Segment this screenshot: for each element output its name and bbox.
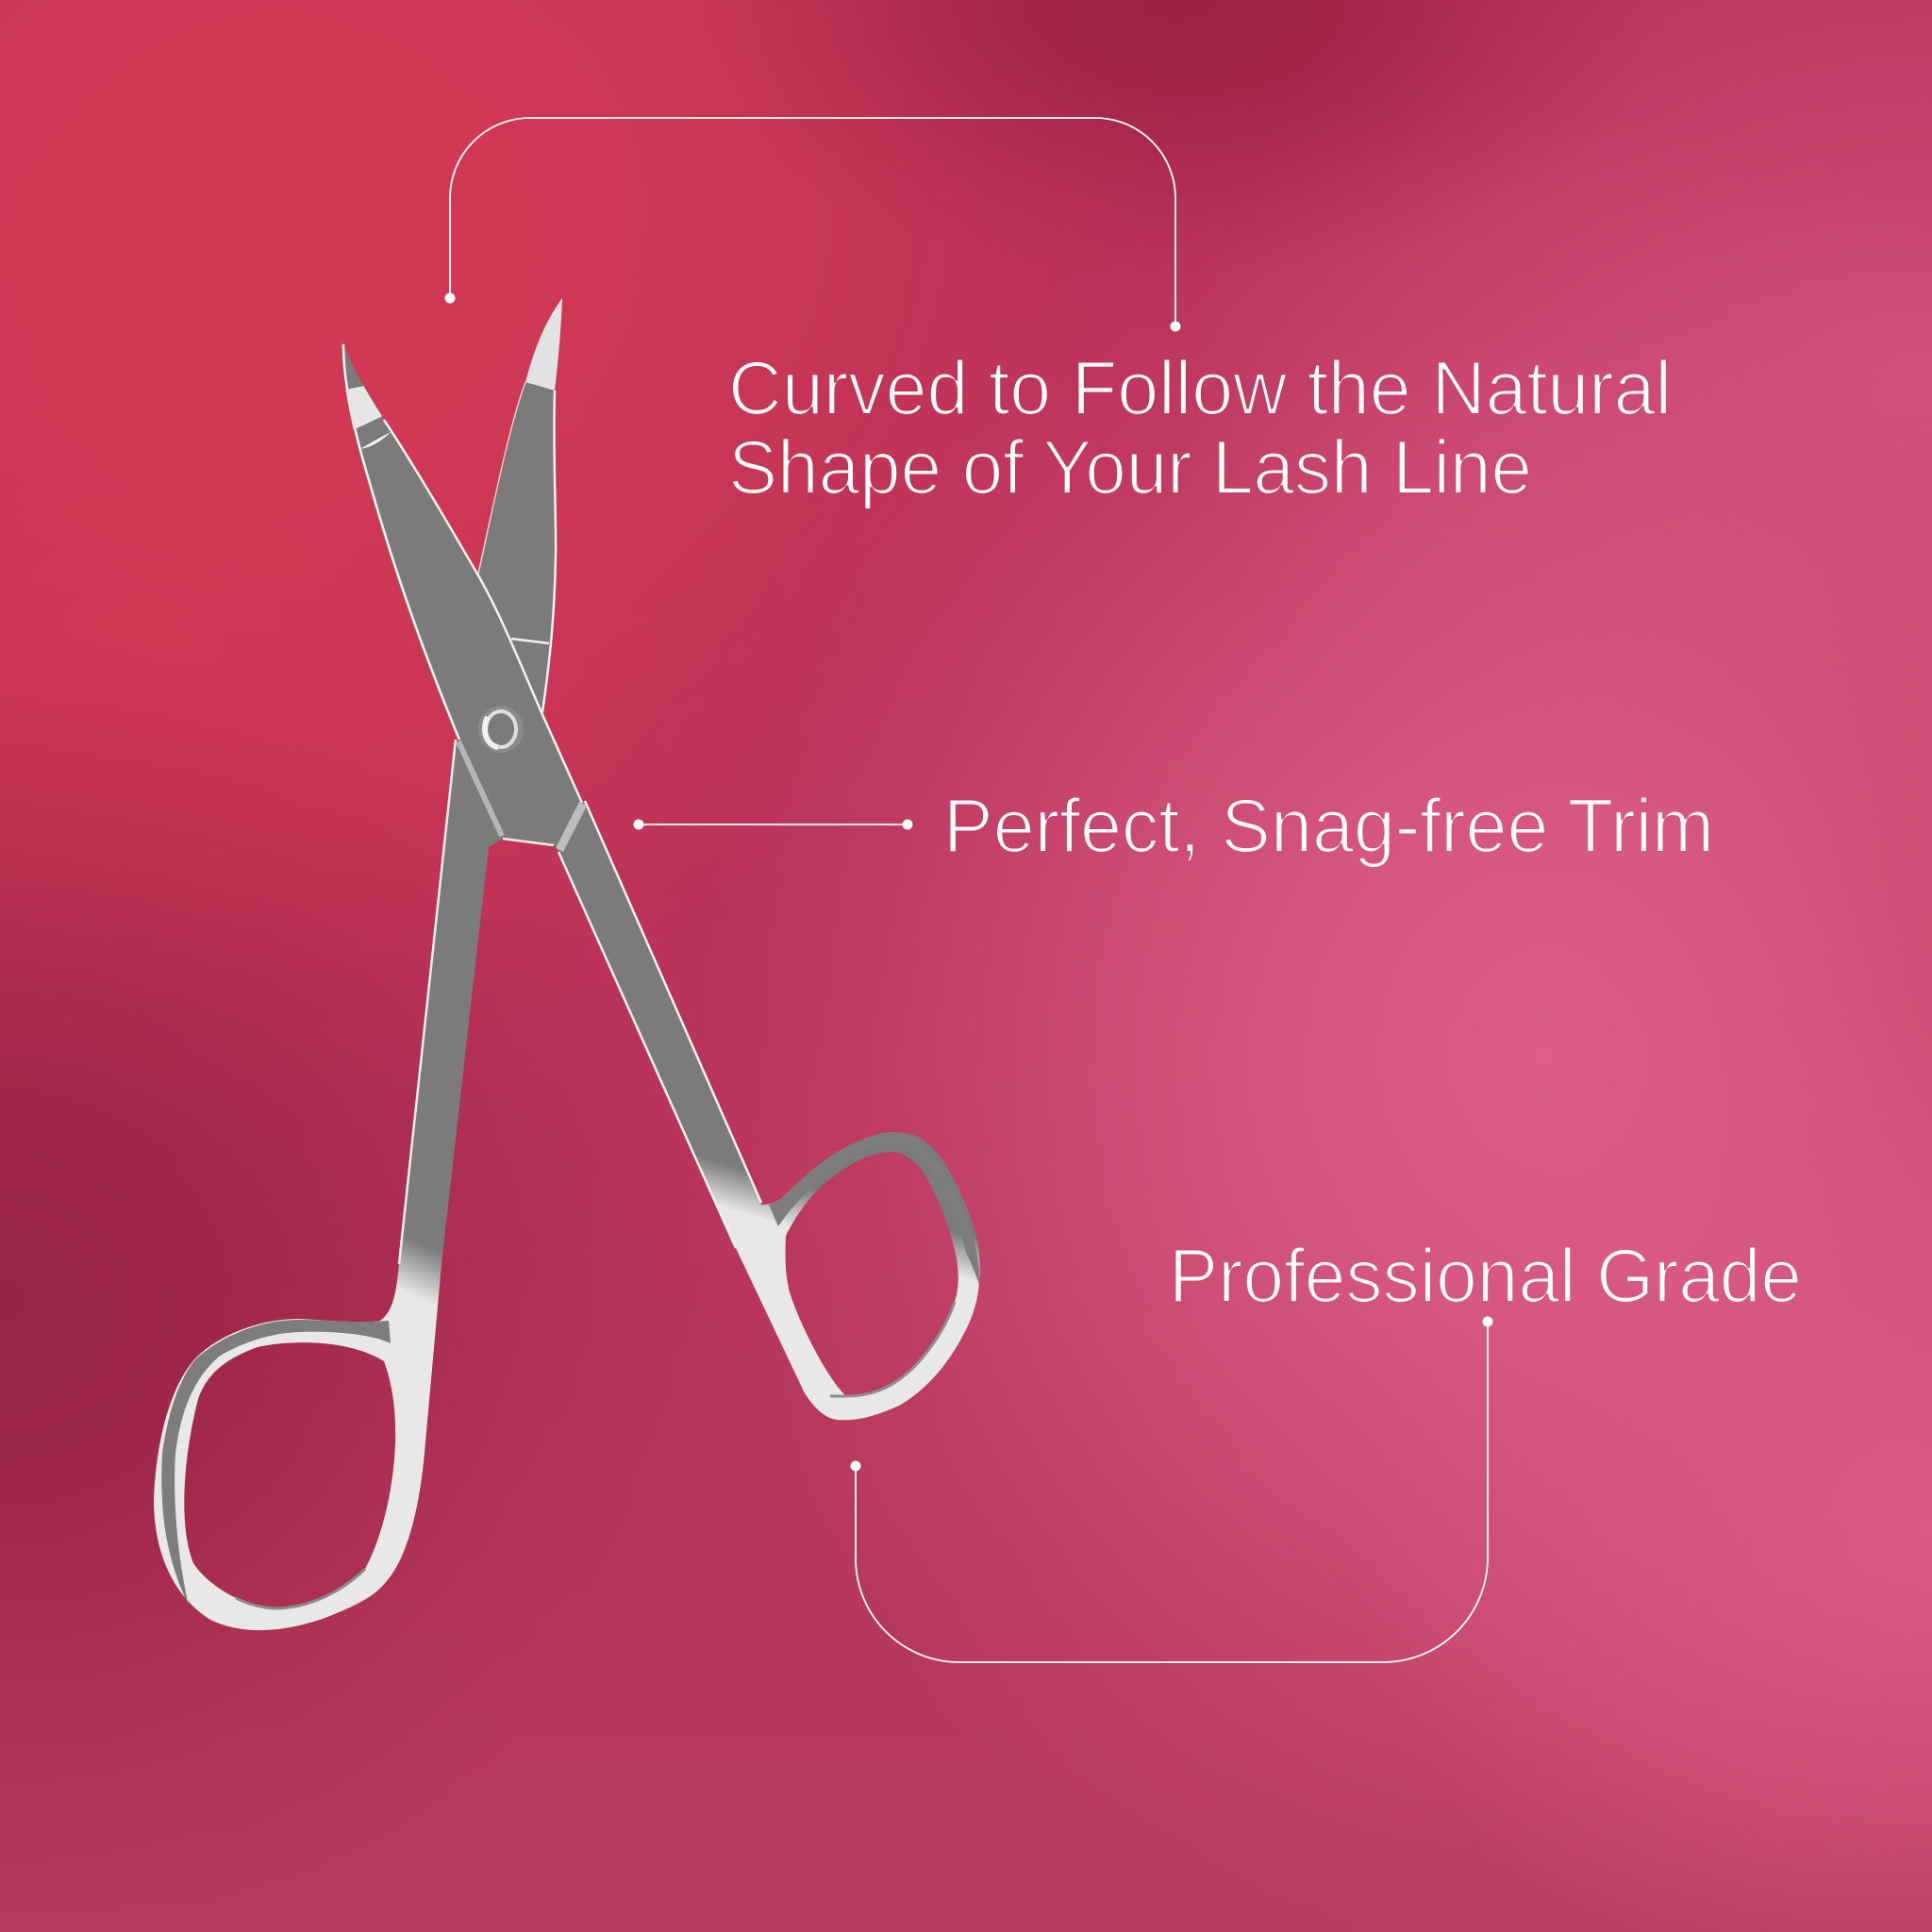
- lower-left handle with finger ring: [154, 740, 503, 1630]
- text: trim heading: Perfect, Snag-free Trim: [943, 784, 1714, 869]
- text: curved blade heading: Curved to Follow the Natural: [728, 346, 1672, 431]
- back blade: [472, 298, 562, 712]
- blade edge highlights: [343, 344, 761, 1248]
- front blade with lower-right handle and finger ring: [335, 340, 980, 1420]
- pivot screw: [478, 706, 524, 753]
- scissors illustration: [154, 298, 980, 1630]
- bevel at blade base: [458, 741, 502, 836]
- callout: curved blade bracket: [445, 118, 1181, 332]
- blade tip highlight: [345, 386, 382, 430]
- ring shading band: [769, 1132, 979, 1285]
- text: curved blade heading: [728, 346, 1672, 510]
- infographic canvas: [154, 117, 1798, 1663]
- callout: trim connector: [634, 819, 913, 830]
- text: professional grade heading: Professional Grade: [1169, 1234, 1802, 1319]
- callout: professional grade bracket: [851, 1317, 1492, 1662]
- text: curved blade heading: Shape of Your Lash Line: [728, 425, 1532, 510]
